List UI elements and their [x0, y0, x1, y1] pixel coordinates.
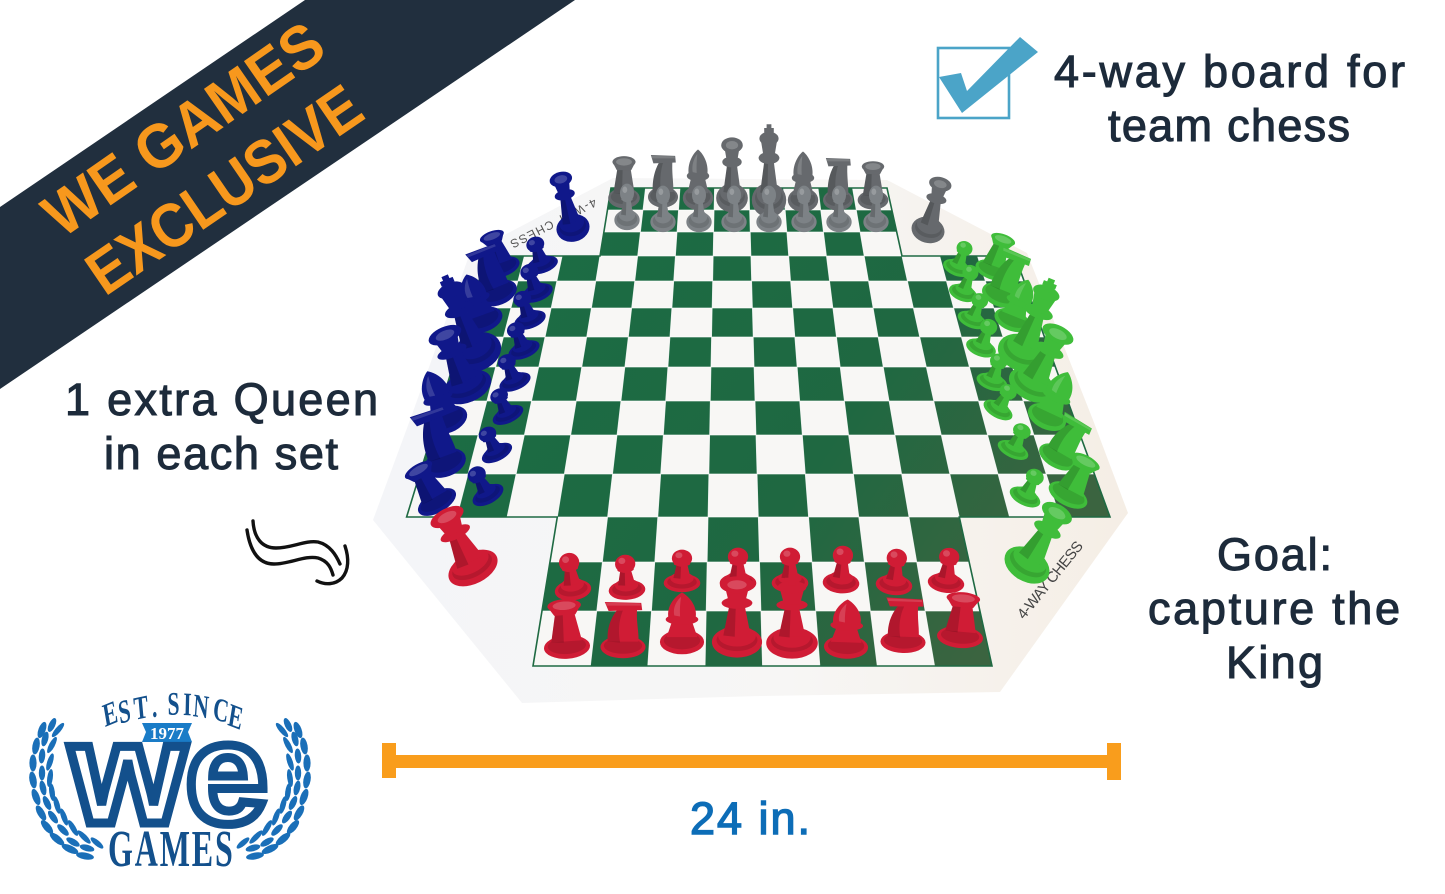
green chess pieces [941, 229, 1107, 591]
text: 4-way board callout: 4-way board for [1054, 46, 1405, 97]
board squares: white base [407, 188, 1110, 666]
text: goal callout: King [1226, 637, 1323, 688]
banner: diagonal ribbon [0, 0, 575, 389]
text: goal callout: Goal: [1217, 529, 1332, 580]
icon: blue check box [938, 37, 1038, 118]
board outline [407, 188, 1110, 666]
mat label: bottom-right: 4-WAY CHESS [1014, 538, 1087, 623]
logo: we wordmark: we [69, 692, 268, 854]
text: extra queen callout: 1 extra Queen [65, 374, 378, 425]
logo: left laurel [28, 717, 105, 861]
logo: EST. SINCE: T [132, 689, 150, 728]
arrow: hand-drawn squiggle [247, 521, 348, 584]
logo: EST. SINCE: S [167, 686, 180, 723]
text: extra queen callout [65, 374, 378, 479]
banner text: EXCLUSIVE: EXCLUSIVE [74, 72, 375, 309]
blue chess pieces [397, 168, 593, 522]
logo: EST. SINCE: E [226, 697, 245, 738]
logo: EST. SINCE: N [192, 688, 210, 727]
logo: EST. SINCE: E [100, 694, 120, 735]
extra green queen [998, 493, 1082, 591]
logo: EST. SINCE: C [211, 691, 231, 731]
logo: ribbon 1977 [142, 723, 192, 743]
chess board mat [373, 178, 1128, 703]
text: 4-way board callout [1054, 46, 1405, 151]
extra blue queen [543, 168, 593, 245]
mat label: top-left: 4-WAY CHESS [508, 195, 599, 251]
logo: right laurel [235, 717, 312, 861]
board squares: green checker [424, 188, 1109, 666]
text: 24 in.: 24 in. [690, 793, 810, 844]
text: 4-way board callout: team chess [1108, 100, 1350, 151]
banner text: WE GAMES: WE GAMES [31, 9, 337, 251]
logo: ribbon 1977: 1977 [150, 724, 184, 743]
extra red queen [420, 498, 504, 594]
logo: WE Games [28, 686, 312, 878]
extra silver queen [908, 173, 958, 247]
dimension bar: 24 in. [382, 743, 1121, 780]
text: extra queen callout: in each set [104, 428, 338, 479]
logo: EST. SINCE: S [116, 692, 133, 732]
logo: EST. SINCE: I [183, 687, 192, 724]
red chess pieces [420, 498, 987, 660]
logo: GAMES: GAMES [108, 821, 233, 878]
silver chess pieces [608, 124, 958, 247]
text: goal callout: capture the [1148, 583, 1400, 634]
text: goal callout [1148, 529, 1400, 688]
logo: EST. SINCE: . [152, 689, 157, 725]
